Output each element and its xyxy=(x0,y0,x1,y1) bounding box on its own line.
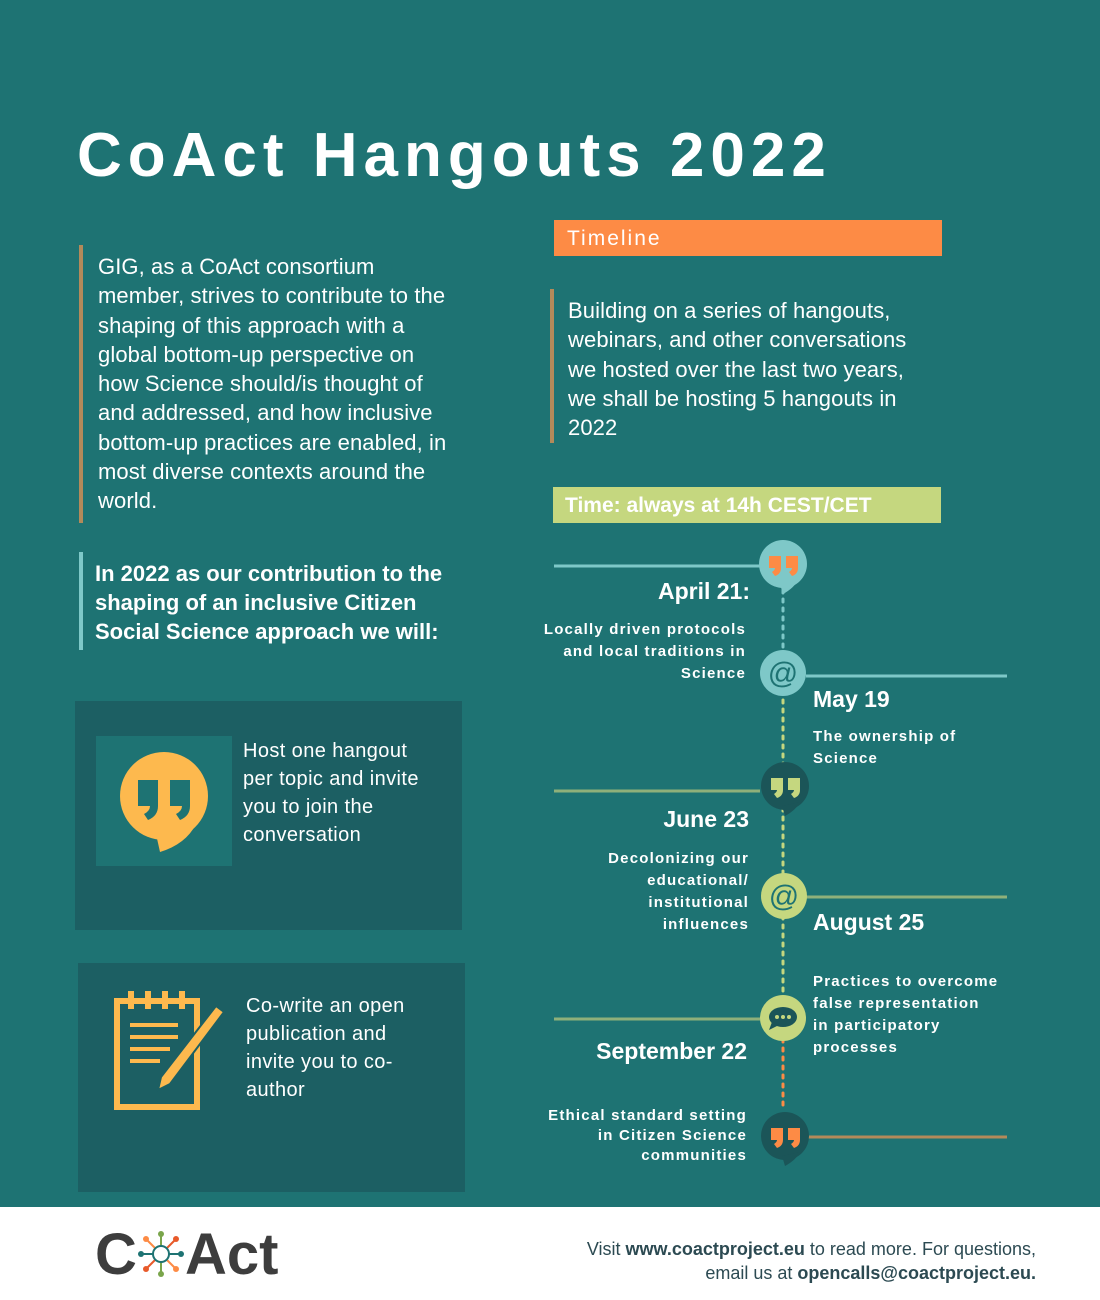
event: September 22: Ethical standard setting xyxy=(548,1107,747,1124)
text: co-write xyxy=(246,995,405,1101)
text block: building: we hosted over the last two years, xyxy=(568,357,904,382)
event: June 23: June 23 xyxy=(663,806,749,832)
event: September 22: September 22 xyxy=(596,1038,747,1064)
event: September 22: in Citizen Science xyxy=(598,1127,747,1144)
footer xyxy=(0,1207,1100,1300)
text block: intro: global bottom-up perspective on xyxy=(98,342,414,367)
event: April 21 xyxy=(544,578,750,682)
heading: timeline xyxy=(554,220,942,256)
icon: quote bubble xyxy=(96,736,232,866)
text: host hangout: you to join the xyxy=(243,796,374,818)
icon: at green xyxy=(761,873,807,919)
text block: building: webinars, and other conversations xyxy=(568,327,906,352)
event: May 19: The ownership of xyxy=(813,728,956,745)
text block: intro: most diverse contexts around the xyxy=(98,459,425,484)
event: April 21: April 21: xyxy=(658,578,750,604)
text: footer contact: email us at opencalls@coactproject.eu. xyxy=(705,1263,1036,1283)
logo: CoAct: Act xyxy=(185,1222,278,1287)
logo: CoAct: C xyxy=(95,1222,137,1287)
event: September 22: communities xyxy=(641,1147,747,1164)
text: host hangout: per topic and invite xyxy=(243,768,419,790)
text block: building xyxy=(550,289,906,443)
text block: intro: shaping of this approach with a xyxy=(98,313,404,338)
event: June 23: educational/ xyxy=(647,872,749,889)
icon: quote dark green xyxy=(761,762,809,816)
text: host hangout: Host one hangout xyxy=(243,740,407,762)
icon: quote light blue xyxy=(759,540,807,593)
icon: notepad pencil xyxy=(114,991,223,1110)
icon: at light blue: @ xyxy=(768,657,798,690)
title: CoAct Hangouts 2022 xyxy=(77,121,832,190)
text block: contribution: shaping of an inclusive Citizen xyxy=(95,590,416,615)
text block: building: we shall be hosting 5 hangouts in xyxy=(568,386,897,411)
banner: time xyxy=(553,487,941,523)
event: June 23: influences xyxy=(663,916,749,933)
event: August 25: processes xyxy=(813,1039,898,1056)
event: June 23 xyxy=(608,806,749,933)
logo: CoAct xyxy=(95,1222,278,1287)
text block: contribution: In 2022 as our contribution to the xyxy=(95,561,442,586)
text block: building: Building on a series of hangouts, xyxy=(568,298,891,323)
icon: chat green xyxy=(760,995,806,1041)
event: May 19 xyxy=(813,686,956,767)
text block: intro: GIG, as a CoAct consortium xyxy=(98,254,374,279)
text block: intro: how Science should/is thought of xyxy=(98,371,423,396)
event: June 23: Decolonizing our xyxy=(608,850,749,867)
panel: host hangout xyxy=(75,701,462,930)
text block: building: 2022 xyxy=(568,415,617,440)
event: August 25: Practices to overcome xyxy=(813,973,998,990)
panel: co-write xyxy=(78,963,465,1192)
text block: contribution: Social Science approach we will: xyxy=(95,619,439,644)
timeline xyxy=(554,540,1007,1166)
icon: at green: @ xyxy=(769,880,799,913)
banner: time: Time: always at 14h CEST/CET xyxy=(565,494,872,517)
text: co-write: publication and xyxy=(246,1023,387,1045)
event: April 21: Locally driven protocols xyxy=(544,621,746,638)
event: April 21: and local traditions in xyxy=(563,643,746,660)
text block: intro: and addressed, and how inclusive xyxy=(98,400,433,425)
event: May 19: Science xyxy=(813,750,878,767)
text: host hangout xyxy=(243,740,419,846)
text block: intro: member, strives to contribute to the xyxy=(98,283,445,308)
text: host hangout: conversation xyxy=(243,824,361,846)
text: footer contact: Visit www.coactproject.eu to read more. For questions, xyxy=(587,1239,1036,1259)
text block: intro xyxy=(79,245,446,523)
event: April 21: Science xyxy=(681,665,746,682)
event: August 25: in participatory xyxy=(813,1017,941,1034)
text block: intro: world. xyxy=(98,488,157,513)
text: co-write: invite you to co- xyxy=(246,1051,393,1073)
text: footer contact xyxy=(587,1239,1036,1283)
event: August 25: August 25 xyxy=(813,909,924,935)
event: August 25 xyxy=(813,909,998,1056)
event: May 19: May 19 xyxy=(813,686,890,712)
text block: contribution xyxy=(79,552,442,650)
event: August 25: false representation xyxy=(813,995,980,1012)
text block: intro: bottom-up practices are enabled, in xyxy=(98,430,446,455)
event: June 23: institutional xyxy=(648,894,749,911)
heading: timeline: Timeline xyxy=(567,227,662,250)
text: co-write: Co-write an open xyxy=(246,995,405,1017)
event: September 22 xyxy=(548,1038,747,1164)
text: co-write: author xyxy=(246,1079,305,1101)
icon: quote dark orange xyxy=(761,1112,809,1166)
icon: at light blue xyxy=(760,650,806,696)
